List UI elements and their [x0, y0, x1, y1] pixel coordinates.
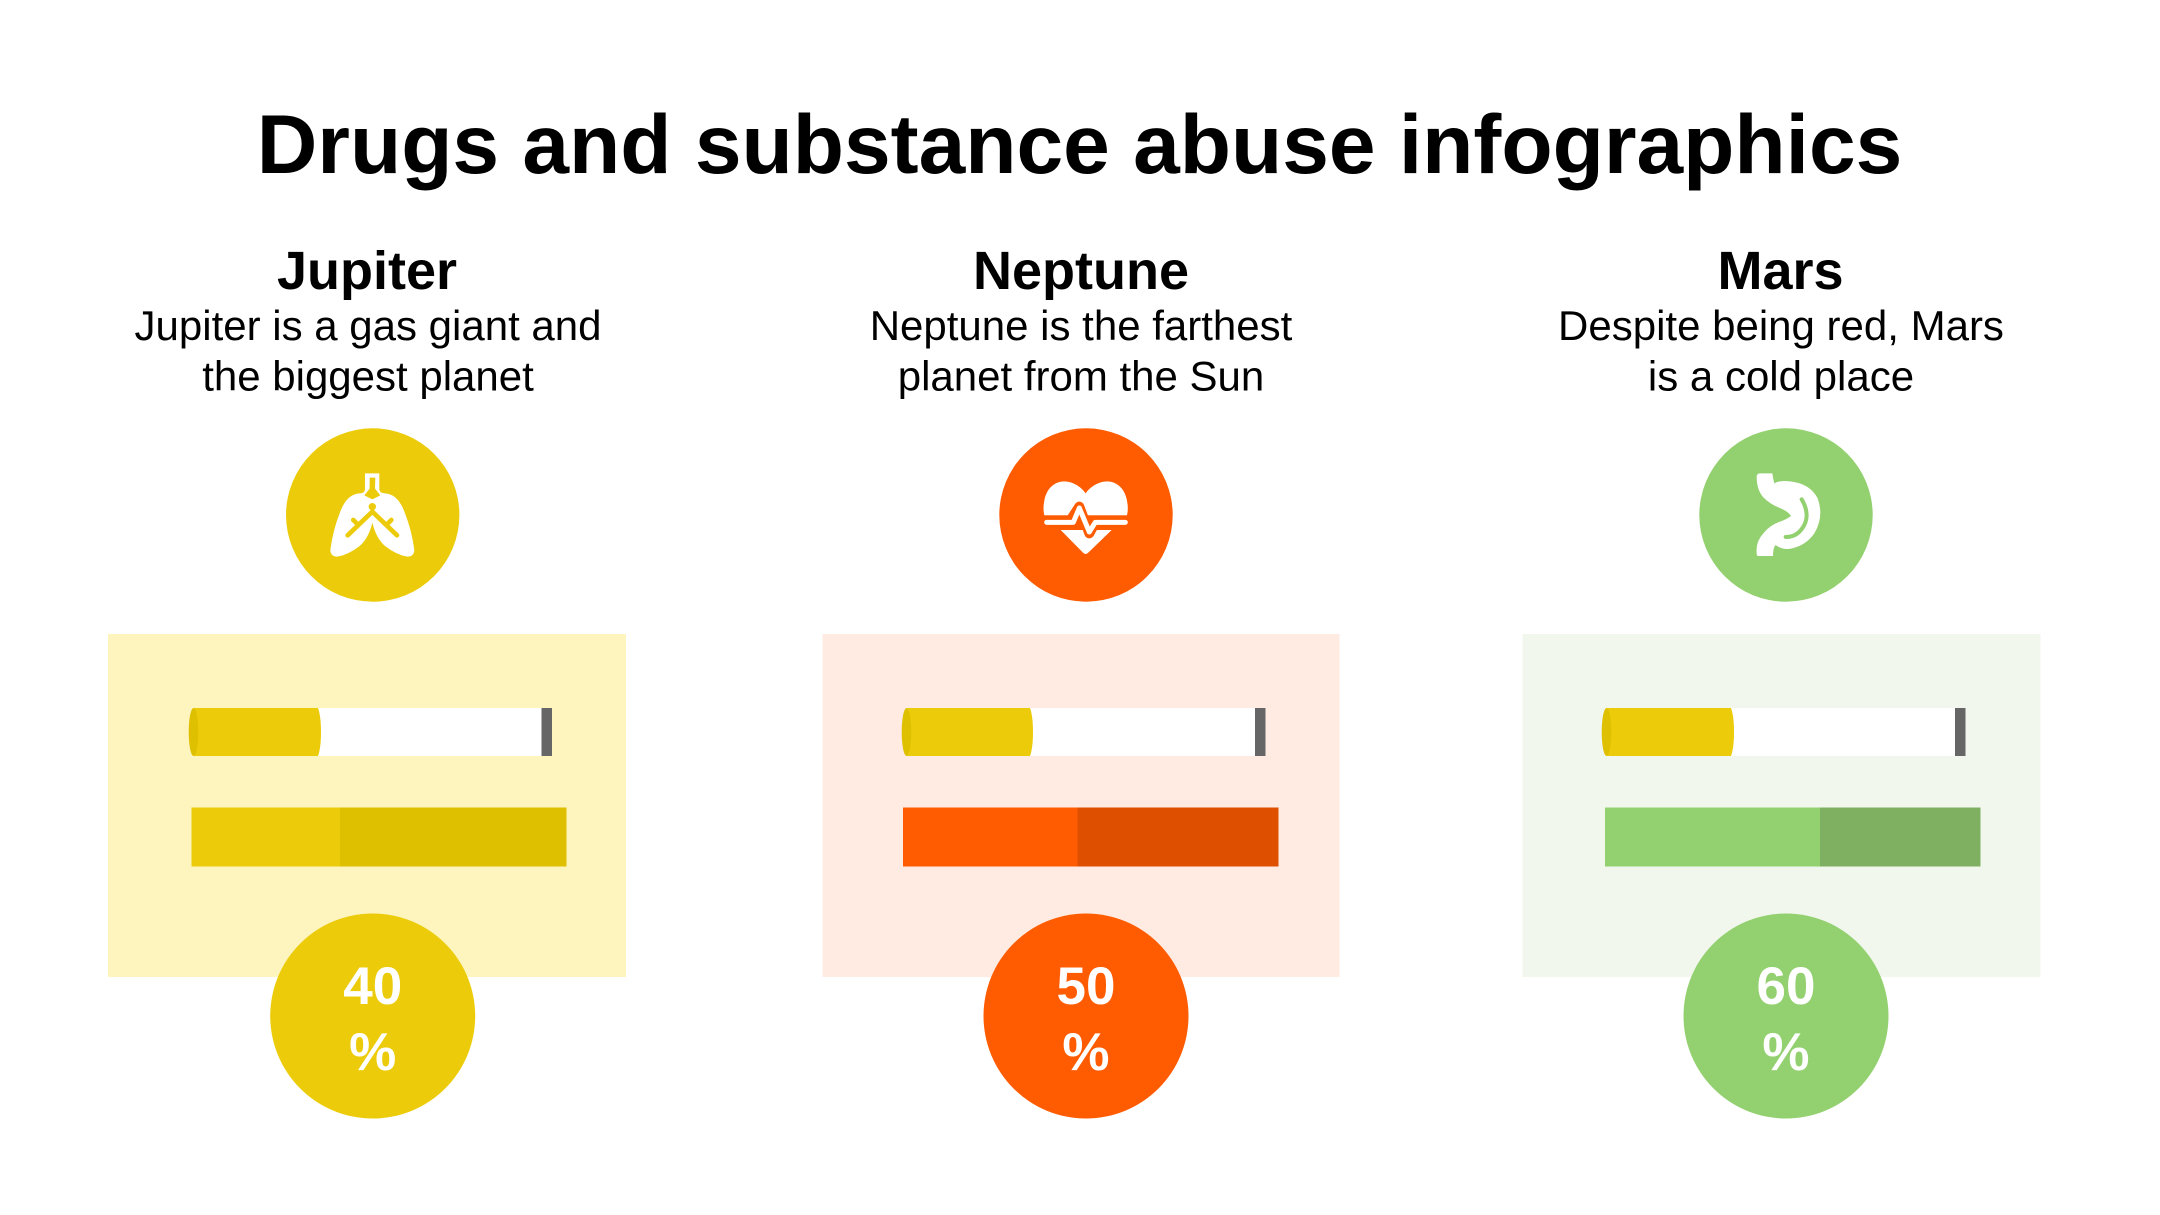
panel: Jupiter background [108, 634, 626, 977]
title: Drugs and substance abuse infographics [257, 97, 1902, 191]
percentage: 60% [1684, 914, 1888, 1118]
percentage: 50%: % [1062, 1023, 1110, 1082]
percentage: 60%: 60 [1757, 957, 1815, 1016]
description: Jupiter: the biggest planet [202, 352, 534, 400]
percentage: 40%: 40 [343, 957, 402, 1016]
column: Neptune [822, 241, 1340, 1118]
panel: Mars background [1522, 634, 2040, 977]
percentage: 50%: 50 [1057, 957, 1115, 1016]
heading: Jupiter: Jupiter [277, 241, 457, 301]
percentage: 50% [984, 914, 1188, 1118]
heading: Mars: Mars [1717, 241, 1844, 301]
percentage: 40% [270, 914, 475, 1118]
description: Mars: is a cold place [1648, 352, 1914, 400]
description: Neptune: planet from the Sun [898, 352, 1264, 400]
progress bar: 40% [192, 808, 566, 866]
panel: Neptune background [822, 634, 1340, 977]
column: Jupiter [108, 241, 626, 1118]
icon: heart with pulse [999, 428, 1173, 602]
cigarette [1602, 708, 1966, 756]
cigarette [902, 708, 1266, 756]
progress bar: 60% [1605, 808, 1980, 866]
description: Mars: Despite being red, Mars [1558, 302, 2004, 349]
percentage: 40%: % [349, 1023, 396, 1082]
description: Neptune: Neptune is the farthest [870, 302, 1293, 349]
icon: stomach [1699, 428, 1873, 602]
percentage: 60%: % [1762, 1023, 1810, 1082]
cigarette [189, 708, 552, 756]
progress bar: 50% [903, 808, 1278, 866]
column: Mars [1522, 241, 2040, 1118]
heading: Neptune: Neptune [973, 241, 1189, 301]
icon: lungs [286, 428, 459, 602]
description: Jupiter: Jupiter is a gas giant and [135, 302, 601, 349]
